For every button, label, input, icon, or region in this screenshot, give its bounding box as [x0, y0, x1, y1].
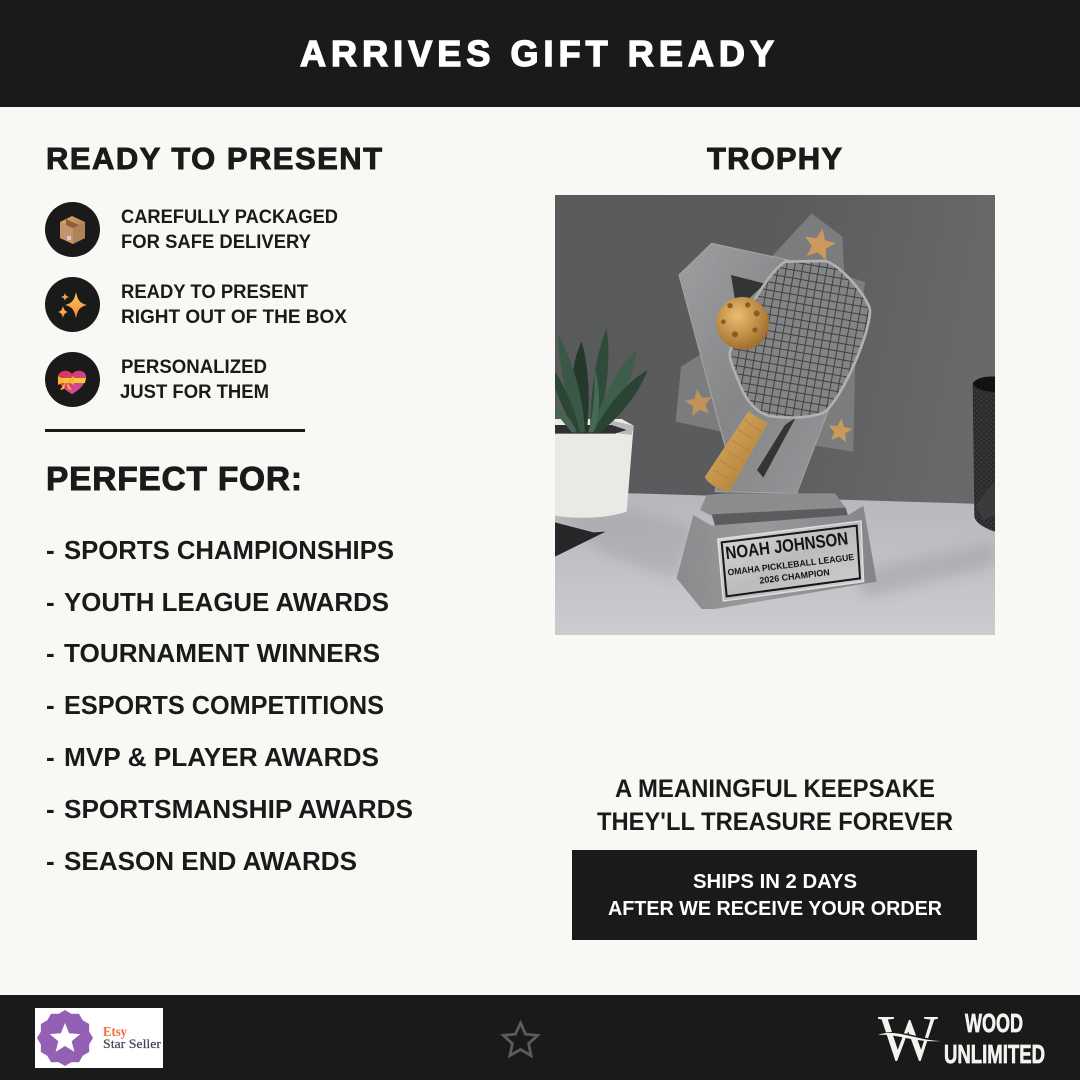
- nameplate: NOAH JOHNSON: [724, 528, 849, 563]
- feature: personalized: JUST FOR THEM: [120, 381, 269, 403]
- badge: etsy star seller: Etsy: [103, 1025, 127, 1040]
- list: award occasions: SEASON END AWARDS: [64, 846, 357, 876]
- list: award occasions: -: [46, 587, 55, 617]
- panel: ready to present: [45, 141, 382, 407]
- trophy upper base: [700, 493, 846, 516]
- callout: shipping: AFTER WE RECEIVE YOUR ORDER: [608, 898, 943, 920]
- ball: [716, 297, 769, 350]
- feature: personalized: [45, 352, 269, 407]
- heading: ready to present: READY TO PRESENT: [46, 141, 382, 176]
- badge: etsy star seller: [35, 1008, 163, 1068]
- list: award occasions: -: [46, 846, 55, 876]
- trophy frame: [679, 243, 832, 493]
- feature: personalized: PERSONALIZED: [121, 356, 267, 378]
- header band: [0, 0, 1080, 107]
- plant: [548, 328, 648, 432]
- list: award occasions: TOURNAMENT WINNERS: [64, 638, 380, 668]
- list: award occasions: SPORTS CHAMPIONSHIPS: [64, 535, 394, 565]
- trophy back plate: [676, 213, 865, 452]
- list: award occasions: -: [46, 535, 55, 565]
- gold star: right: [828, 418, 852, 442]
- callout: shipping: [572, 850, 977, 940]
- title: ARRIVES GIFT READY: [300, 33, 774, 74]
- logo: wood unlimited: W: [878, 1002, 939, 1075]
- list: award occasions: -: [46, 638, 55, 668]
- logo: wood unlimited: [877, 1002, 1045, 1075]
- icon: sparkles: [58, 292, 87, 318]
- callout: shipping: SHIPS IN 2 DAYS: [693, 871, 857, 893]
- laptop: [555, 522, 606, 557]
- handle: [705, 412, 768, 491]
- footer band: [0, 995, 1080, 1080]
- tagline: keepsake: THEY'LL TREASURE FOREVER: [597, 808, 953, 836]
- heading: trophy: TROPHY: [707, 141, 842, 176]
- gold star: top: [805, 229, 836, 260]
- list: award occasions: MVP & PLAYER AWARDS: [64, 742, 379, 772]
- feature: carefully packaged: FOR SAFE DELIVERY: [121, 231, 311, 253]
- feature: ready right out of the box: [45, 277, 347, 332]
- list: award occasions: -: [46, 742, 55, 772]
- white pot: [555, 419, 634, 518]
- nameplate: 2026 CHAMPION: [759, 567, 830, 586]
- logo: wood unlimited: WOOD: [965, 1008, 1023, 1038]
- feature: ready right out of the box: READY TO PRESENT: [121, 281, 308, 303]
- tagline: keepsake: [597, 775, 953, 836]
- icon: heart with ribbon: [58, 371, 86, 394]
- trophy lower base: [677, 506, 877, 609]
- feature: carefully packaged: [45, 202, 338, 257]
- badge: etsy star seller: Star Seller: [103, 1036, 162, 1051]
- feature: carefully packaged: CAREFULLY PACKAGED: [121, 206, 338, 228]
- pen cup: [973, 376, 995, 532]
- heading: perfect for: PERFECT FOR:: [46, 461, 302, 498]
- icon: outline star: [503, 1023, 538, 1056]
- list: award occasions: YOUTH LEAGUE AWARDS: [64, 587, 389, 617]
- list: award occasions: -: [46, 690, 55, 720]
- gold star: left: [685, 389, 712, 416]
- list: award occasions: [46, 535, 413, 876]
- feature: ready right out of the box: RIGHT OUT OF THE BOX: [121, 306, 347, 328]
- list: award occasions: SPORTSMANSHIP AWARDS: [64, 794, 413, 824]
- frame openings: [731, 275, 796, 478]
- nameplate: OMAHA PICKLEBALL LEAGUE: [727, 552, 855, 577]
- list: award occasions: ESPORTS COMPETITIONS: [64, 690, 384, 720]
- nameplate: [718, 521, 864, 601]
- tagline: keepsake: A MEANINGFUL KEEPSAKE: [615, 775, 935, 803]
- list: award occasions: -: [46, 794, 55, 824]
- photo: pickleball trophy on desk: [548, 195, 995, 635]
- paddle head: [730, 261, 870, 418]
- icon: package box: [60, 216, 85, 244]
- panel: perfect for: [46, 461, 413, 876]
